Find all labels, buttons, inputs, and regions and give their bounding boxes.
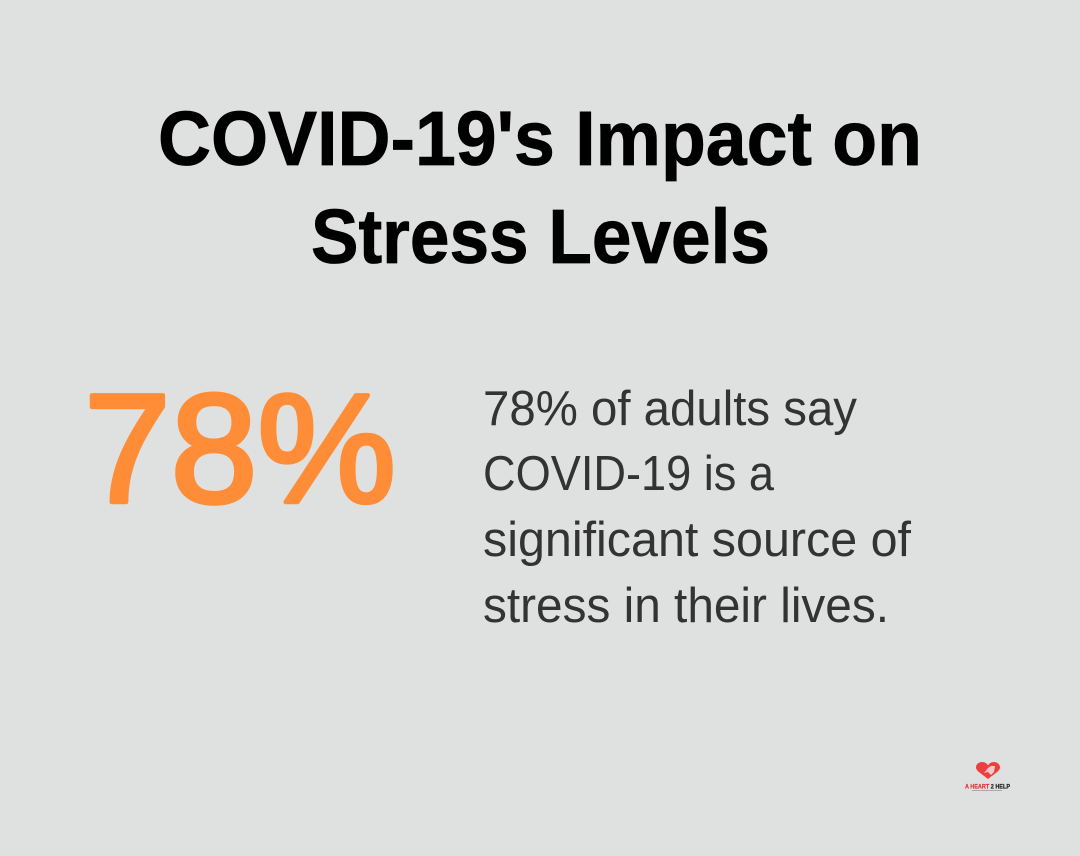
description text: stress in their lives. bbox=[483, 579, 889, 633]
title bbox=[158, 96, 922, 280]
description text: 78% of adults say bbox=[483, 382, 857, 436]
title: Stress Levels bbox=[311, 194, 770, 280]
logo tagline bbox=[972, 790, 1002, 791]
big statistic: 78%: 78% bbox=[84, 362, 396, 535]
icon: figures inside heart bbox=[984, 766, 995, 775]
logo: A Heart 2 Help bbox=[965, 762, 1011, 791]
description text: COVID-19 is a bbox=[483, 447, 775, 501]
icon: heart bbox=[976, 762, 1000, 779]
title: COVID-19's Impact on bbox=[158, 96, 922, 182]
logo wordmark: A HEART 2 HELP bbox=[965, 784, 1011, 790]
description text bbox=[483, 382, 911, 633]
description text: significant source of bbox=[483, 513, 911, 567]
